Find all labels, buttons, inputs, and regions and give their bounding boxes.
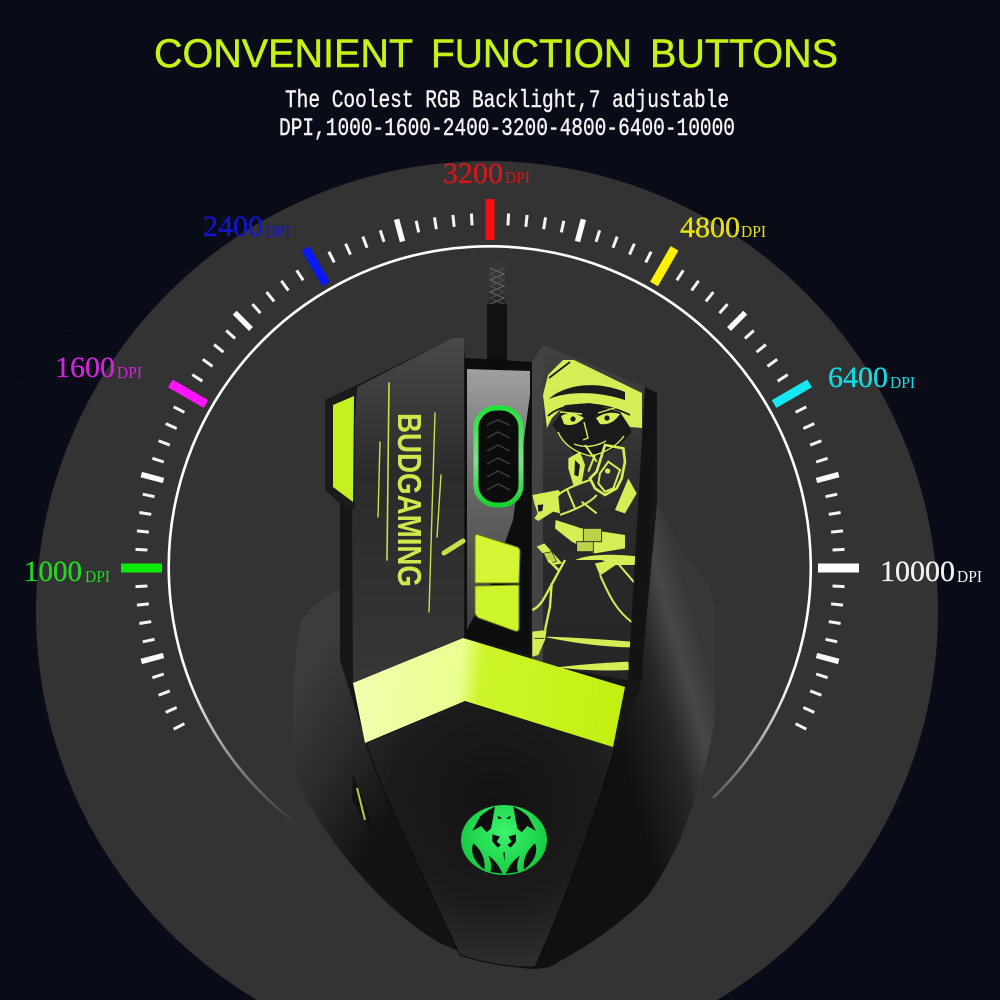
label: 6400 DPI: 6400 — [828, 361, 888, 394]
character illustration — [532, 360, 642, 670]
label: 2400 DPI — [203, 210, 290, 243]
slash accents — [378, 383, 463, 612]
mouse — [293, 262, 715, 969]
title — [154, 32, 838, 76]
label: 1600 DPI — [55, 351, 142, 384]
coloured DPI ticks — [121, 199, 859, 568]
left top panel — [352, 338, 464, 683]
label: 4800 DPI — [680, 211, 766, 244]
side rims — [325, 338, 657, 967]
label: 3200 DPI: 3200 — [443, 157, 503, 190]
minor ticks — [135, 213, 845, 729]
helmet — [543, 360, 642, 428]
medium white ticks — [141, 219, 839, 661]
scroll wheel — [476, 408, 521, 505]
side thumb buttons — [352, 775, 376, 830]
hip straps — [537, 543, 562, 565]
title: FUNCTION — [431, 32, 632, 76]
label: 1600 DPI: 1600 — [55, 351, 115, 384]
label: 1000 DPI: DPI — [85, 567, 110, 586]
title: BUTTONS — [650, 32, 838, 76]
label: 10000 DPI: 10000 — [880, 555, 955, 588]
right top panel — [532, 345, 645, 680]
white inner arc — [169, 246, 811, 824]
shoulder and pocket — [590, 445, 625, 495]
right rim strip — [628, 387, 657, 680]
left wing — [293, 590, 530, 969]
eyes — [561, 413, 584, 425]
label: 1000 DPI: 1000 — [24, 555, 82, 588]
right wing cutouts — [513, 807, 536, 832]
title: CONVENIENT — [154, 32, 413, 76]
swirl and eyes — [492, 834, 516, 848]
left wing cutouts — [472, 807, 495, 832]
arm and hand — [532, 490, 561, 521]
label: 2400 DPI: DPI — [265, 222, 290, 241]
label: 4800 DPI: 4800 — [680, 211, 740, 244]
lime chevron band — [353, 638, 625, 747]
face shadow — [552, 403, 632, 457]
label: 4800 DPI: DPI — [741, 222, 766, 241]
label: 10000 DPI: DPI — [957, 567, 982, 586]
subtitle: DPI,1000-1600-2400-3200-4800-6400-10000 — [279, 114, 735, 143]
label: 6400 DPI: DPI — [890, 373, 915, 392]
legs group — [532, 560, 635, 670]
label: 3200 DPI — [443, 157, 530, 190]
dial disc — [36, 161, 938, 1000]
centre channel — [465, 358, 532, 655]
palm shell — [366, 701, 615, 967]
subtitle: The Coolest RGB Backlight,7 adjustable — [285, 86, 729, 115]
right wing — [530, 500, 715, 969]
side flap — [615, 478, 637, 513]
subtitle — [279, 86, 735, 143]
bat logo — [461, 805, 547, 875]
belt — [555, 520, 625, 553]
label: 2400 DPI: 2400 — [203, 210, 263, 243]
DPI lime buttons — [475, 534, 520, 631]
braided cable — [487, 262, 507, 368]
label: 6400 DPI — [828, 361, 915, 394]
label: 1000 DPI — [24, 555, 110, 588]
brand text: BUDGAMING: BUDGAMING — [391, 413, 428, 587]
label: 1600 DPI: DPI — [117, 363, 142, 382]
label: 3200 DPI: DPI — [505, 168, 530, 187]
side lime button — [325, 388, 355, 510]
chest patch — [568, 452, 585, 485]
torso group — [532, 445, 642, 565]
